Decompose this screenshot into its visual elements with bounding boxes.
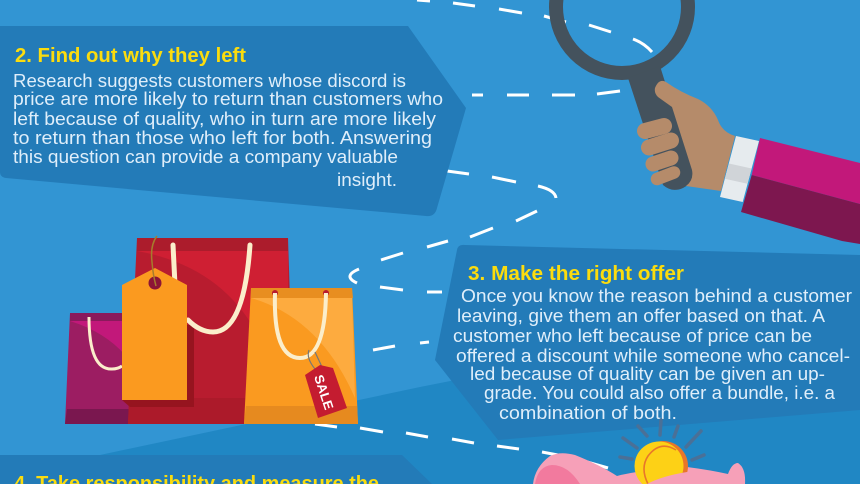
sale tag: SALE (311, 373, 337, 412)
coin rays (620, 420, 704, 460)
icon: shopping bags (65, 236, 358, 424)
text block: research: to return than those who left for both. Answering (13, 128, 432, 148)
text block: offer: grade. You could also offer a bundle, i.e. a (484, 383, 836, 403)
text block: research: this question can provide a company valuable (13, 147, 398, 167)
text block: offer (453, 286, 852, 423)
dashed path (315, 0, 652, 468)
heading: make the right offer: 3. Make the right offer (468, 263, 684, 285)
text block: research: insight. (337, 170, 397, 190)
text block: offer: led because of quality can be given an up- (470, 364, 825, 384)
text block: offer: Once you know the reason behind a customer (461, 286, 852, 306)
text block: offer: leaving, give them an offer based on that. A (457, 306, 825, 326)
coin (634, 441, 688, 484)
icon: magnifying glass and hand (556, 0, 860, 244)
red bag (122, 238, 290, 424)
text block: offer: combination of both. (499, 403, 677, 423)
panel: 3. make the right offer (435, 245, 860, 440)
sale tag (305, 350, 347, 418)
text block: research: left because of quality, who in turn are more likely (13, 109, 436, 129)
price tag (122, 236, 187, 400)
text block: offer: offered a discount while someone who cancel- (456, 346, 850, 366)
icon: piggy bank with coin (533, 420, 745, 484)
text block: research: price are more likely to return than customers who (13, 89, 443, 109)
text block: research (13, 71, 443, 190)
panel: 2. find out why they left (0, 26, 466, 216)
orange bag (244, 288, 358, 424)
text block: research: Research suggests customers whose discord is (13, 71, 406, 91)
panel: 4. take responsibility (0, 455, 432, 484)
purple bag (65, 313, 135, 424)
text block: offer: customer who left because of price can be (453, 326, 812, 346)
heading: find out why they left: 2. Find out why they left (15, 45, 246, 67)
